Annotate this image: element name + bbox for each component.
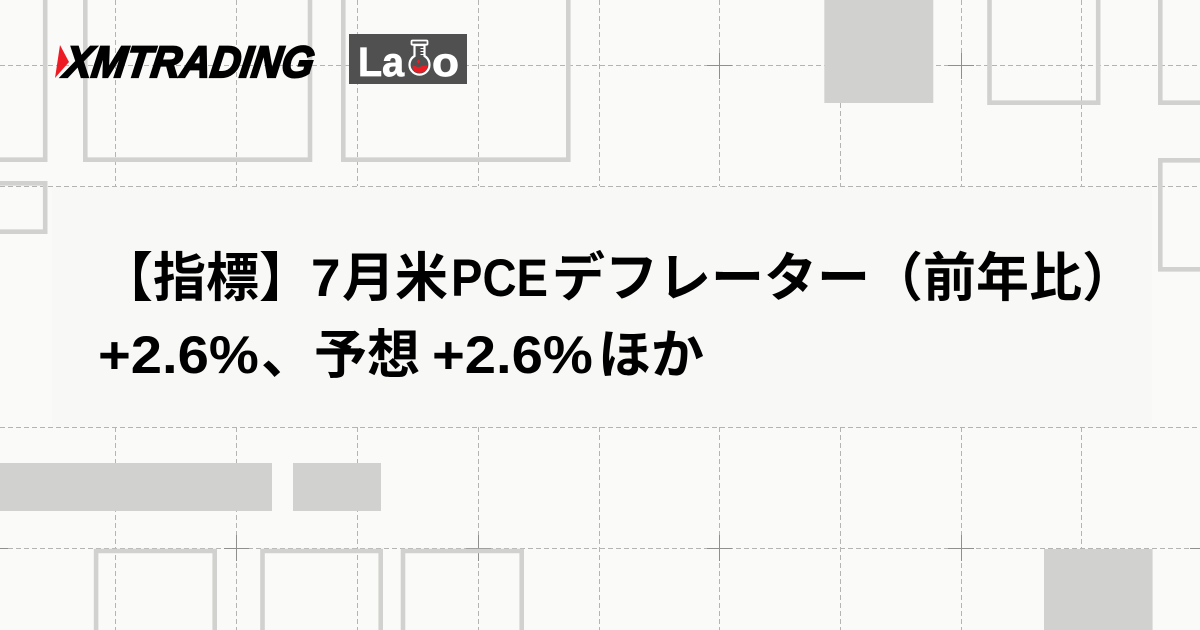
title panel (52, 187, 1152, 427)
logo: XMTRADING (55, 38, 317, 84)
logo letter o: o (432, 39, 459, 84)
title: 【指標】 (100, 249, 312, 308)
title (98, 249, 1135, 385)
title: PCE (451, 249, 548, 308)
logo letters La: La (358, 39, 405, 84)
icon: red arrow (55, 45, 69, 78)
logo: Lab (349, 34, 467, 84)
icon: flask (409, 40, 430, 75)
title: デフレーター（前年比） (552, 249, 1135, 308)
title: 月米 (342, 249, 448, 308)
title: 、予想 (261, 326, 420, 385)
title: 7 (311, 249, 340, 308)
title: ほか (598, 326, 704, 385)
title: +2.6% (98, 326, 259, 385)
title: +2.6% (432, 326, 593, 385)
